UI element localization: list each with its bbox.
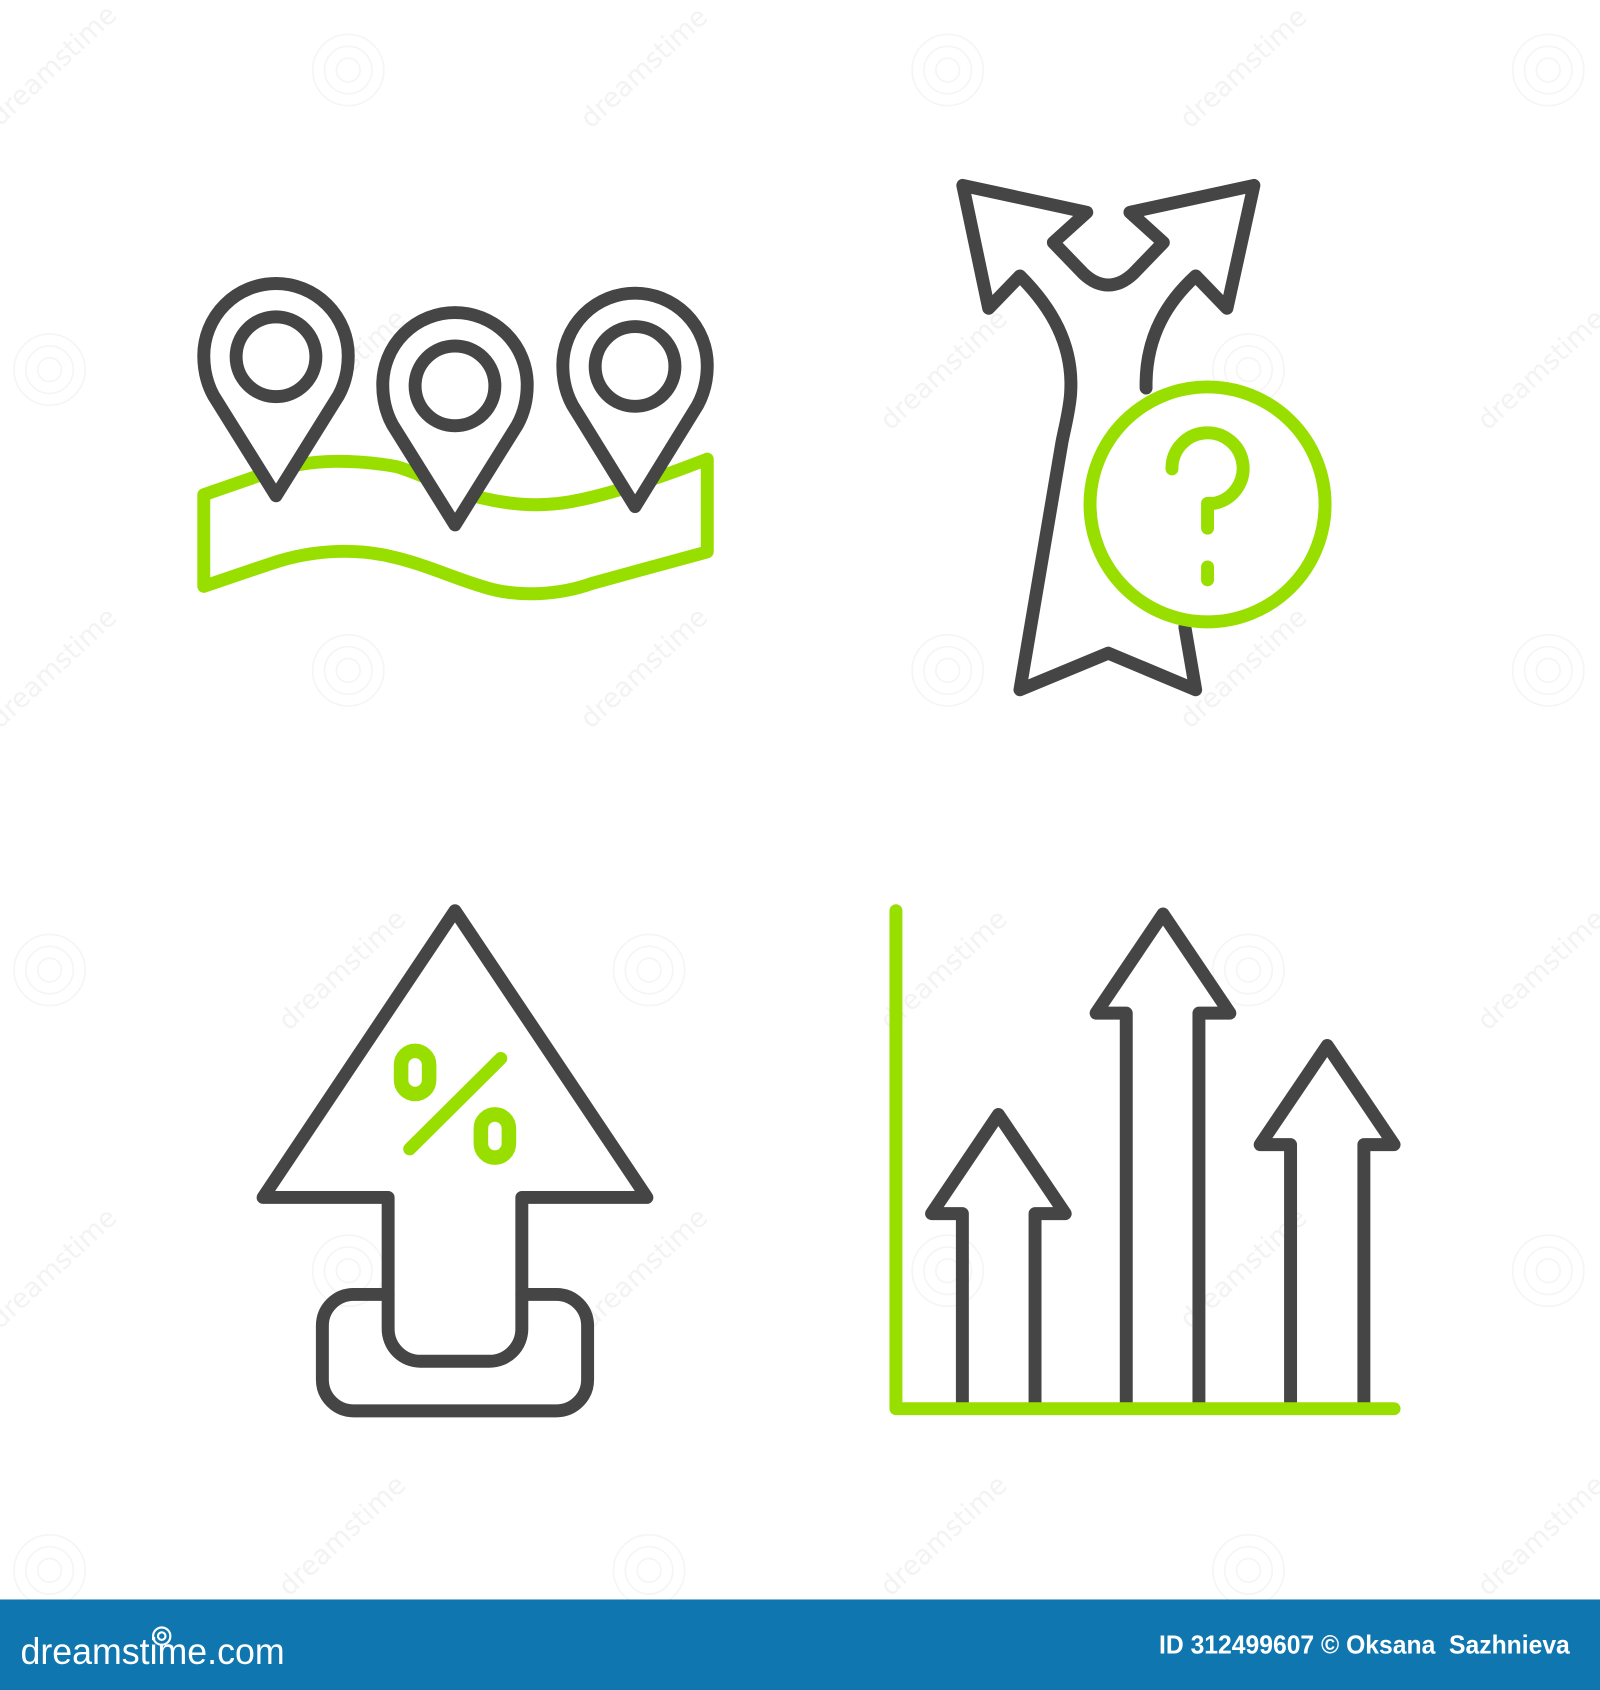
forked arrow outline bbox=[963, 185, 1254, 690]
icon: map with three location pins bbox=[204, 283, 707, 594]
chart axes bbox=[896, 911, 1394, 1409]
logo: dreamstime.com: dreamstime.com bbox=[20, 1631, 285, 1672]
icon: fork in the road arrows with question mark bbox=[963, 185, 1325, 690]
watermark pattern: dreamstime bbox=[874, 303, 1014, 436]
tray bbox=[322, 1294, 588, 1411]
icon: growth chart with rising arrows bbox=[896, 911, 1394, 1409]
logo spiral bbox=[153, 1627, 170, 1645]
watermark pattern: dreamstime bbox=[874, 904, 1014, 1037]
footer banner bbox=[0, 1599, 1600, 1690]
watermark pattern: dreamstime bbox=[1174, 1202, 1313, 1335]
watermark pattern: dreamstime bbox=[273, 904, 412, 1037]
watermark pattern: dreamstime bbox=[1174, 602, 1313, 735]
watermark pattern: dreamstime bbox=[574, 1, 714, 134]
pin: left bbox=[204, 283, 348, 496]
pin: right bbox=[563, 293, 707, 507]
watermark pattern: dreamstime bbox=[273, 303, 412, 436]
wavy map outline bbox=[204, 459, 707, 594]
arrow: tall bbox=[1096, 914, 1230, 1405]
question circle bbox=[1090, 387, 1325, 622]
arrow: medium bbox=[1260, 1045, 1394, 1405]
arrow: short bbox=[932, 1114, 1065, 1405]
icon: percent up arrow from tray bbox=[263, 911, 647, 1411]
watermark pattern: dreamstime bbox=[1174, 1, 1313, 134]
pin: middle bbox=[383, 313, 527, 525]
percent sign bbox=[401, 1051, 509, 1158]
watermark pattern: dreamstime bbox=[874, 1469, 1014, 1602]
watermark pattern: dreamstime bbox=[574, 602, 714, 735]
up arrow bbox=[263, 911, 647, 1361]
watermark pattern: dreamstime bbox=[574, 1202, 714, 1335]
question mark bbox=[1172, 433, 1243, 580]
watermark pattern: dreamstime bbox=[273, 1469, 412, 1602]
image ID and credit: ID 312499607 © Oksana Sazhnieva bbox=[1159, 1631, 1570, 1659]
